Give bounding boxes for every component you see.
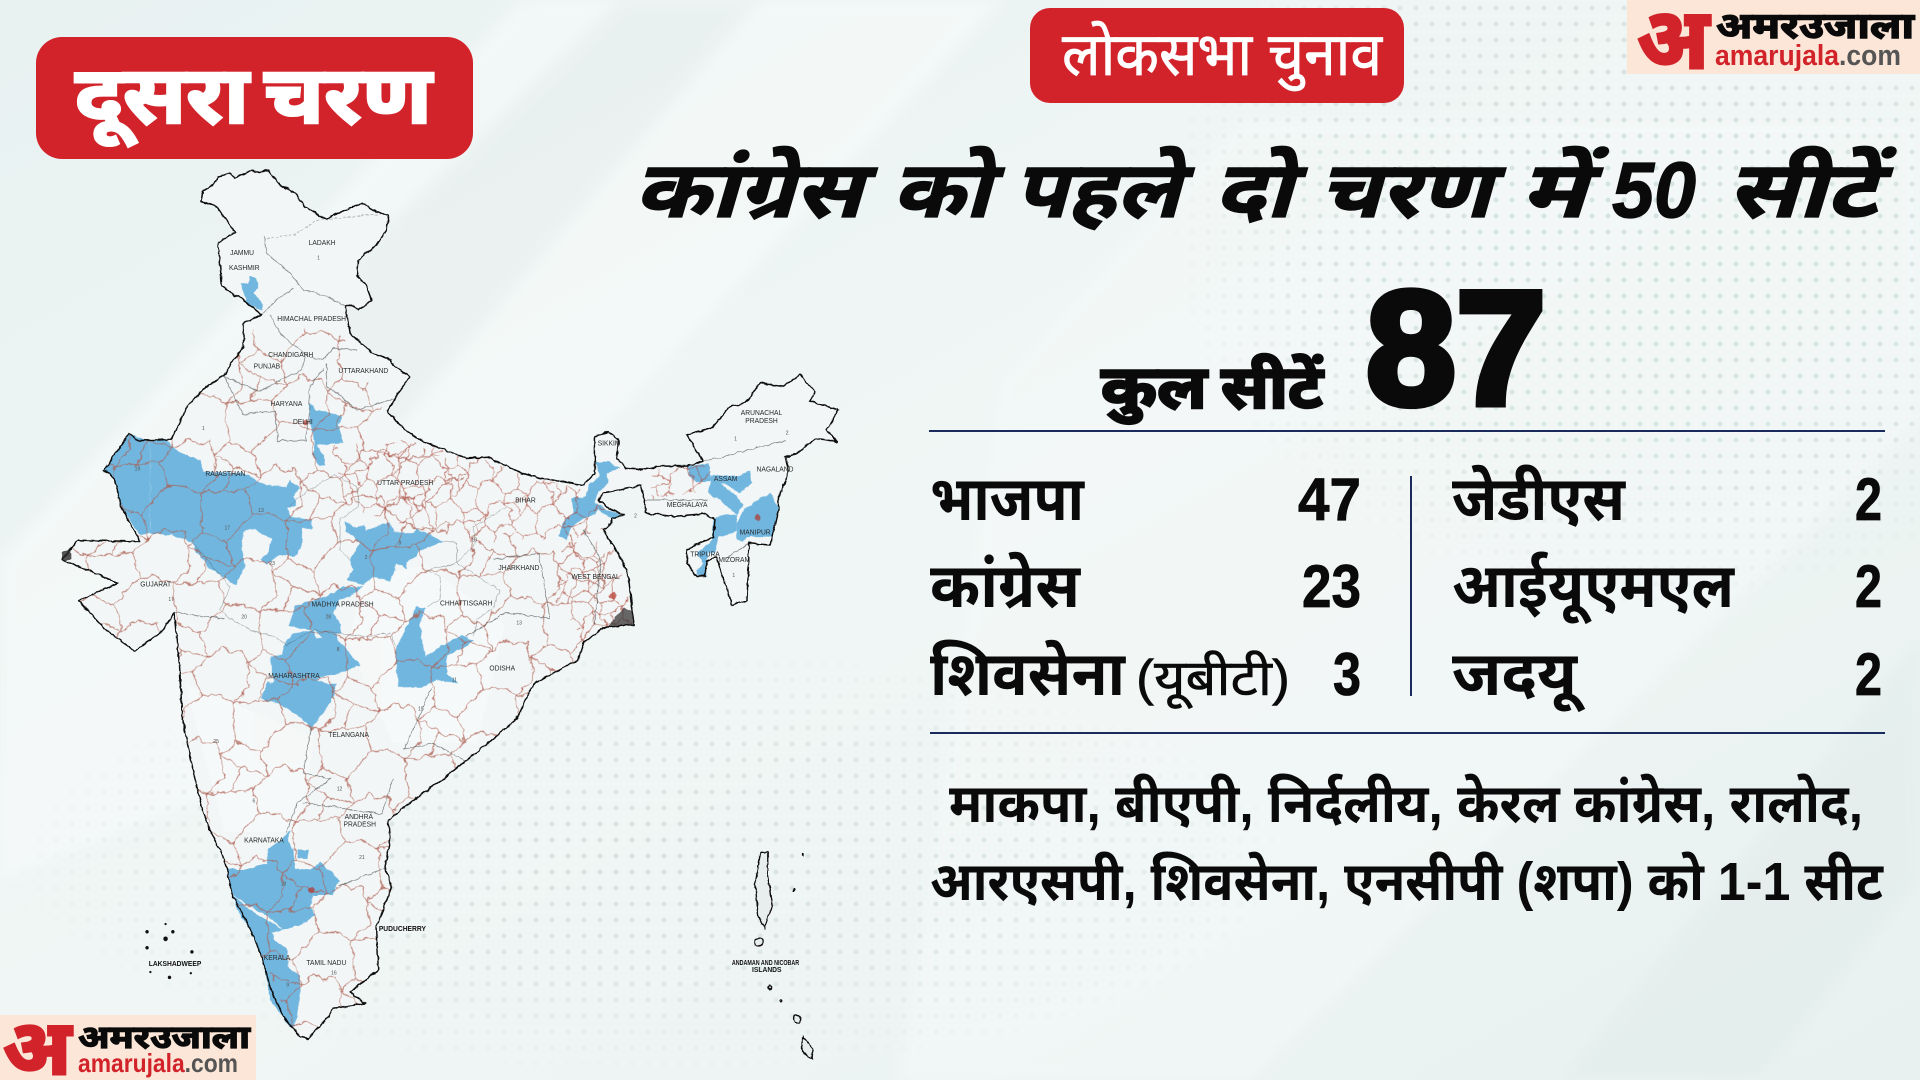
state labels: ANDAMAN AND NICOBAR (732, 960, 799, 967)
map base (62, 170, 838, 1038)
total seats label: कुल (1101, 354, 1209, 425)
map outline (62, 170, 838, 1038)
state labels: CHHATTISGARH (440, 600, 492, 608)
row: BJP: भाजपा (930, 465, 1086, 534)
dark red city clusters (303, 420, 760, 893)
logo: bottom left (0, 1007, 256, 1080)
constituency numbers: 11 (452, 677, 457, 683)
state labels: BIHAR (515, 497, 536, 504)
state labels: LADAKH (309, 240, 336, 247)
constituency numbers: 9 (398, 540, 401, 546)
logo: bottom left: amarujala.com (78, 1048, 238, 1078)
headline: 50 (1612, 145, 1696, 234)
constituency numbers: 25 (213, 739, 219, 745)
logo: top right (1627, 0, 1920, 87)
badge: second phase: दूसरा (75, 51, 251, 147)
state labels: UTTARAKHAND (338, 368, 388, 375)
constituency numbers: 13 (258, 508, 264, 514)
state labels (140, 240, 799, 974)
others note: माकपा, बीएपी, निर्दलीय, केरल कांग्रेस, रालोद, (949, 773, 1863, 834)
badge: Lok Sabha election: लोकसभा चुनाव (1062, 21, 1384, 91)
state labels: CHANDIGARH (268, 352, 313, 359)
constituency numbers: 12 (337, 786, 342, 793)
state labels: SIKKIM (598, 440, 621, 447)
logo: top right: amarujala.com (1715, 40, 1901, 72)
state labels: MEGHALAYA (667, 502, 708, 509)
headline: कांग्रेस (634, 145, 878, 234)
total seats number: 87 (1366, 258, 1546, 439)
headline: पहले (1014, 145, 1195, 234)
state labels: ISLANDS (752, 967, 782, 974)
constituency numbers: 6 (253, 798, 255, 804)
row: Congress: 23 (1302, 553, 1361, 620)
constituency numbers: 23 (269, 561, 275, 567)
seat table (930, 463, 1882, 713)
Kutch coast detail (62, 550, 72, 560)
state labels: DELHI (293, 419, 313, 426)
islands: Andaman and Nicobar (755, 853, 813, 1059)
row: JDU: 2 (1855, 641, 1882, 708)
constituency numbers: 28 (326, 614, 331, 621)
headline: में (1520, 145, 1609, 234)
state labels: ANDHRA (345, 814, 373, 821)
row: JDU (1452, 640, 1882, 713)
white inner states (185, 565, 505, 832)
state labels: NAGALAND (757, 466, 793, 474)
row: JDS: जेडीएस (1452, 463, 1626, 534)
state borders (174, 213, 786, 885)
map of India (62, 168, 840, 1060)
state labels: TRIPURA (690, 551, 720, 558)
state labels: ASSAM (714, 476, 738, 483)
state labels: TELANGANA (328, 732, 369, 739)
state labels: MADHYA PRADESH (311, 602, 374, 609)
state labels: TAMIL NADU (306, 960, 346, 967)
constituency numbers: 2 (365, 555, 368, 561)
state labels: MANIPUR (740, 529, 771, 536)
state labels: ODISHA (489, 666, 516, 673)
row: JDS: 2 (1855, 466, 1882, 533)
constituency numbers: 17 (168, 597, 174, 603)
constituency numbers (135, 256, 789, 988)
state labels: HARYANA (271, 401, 303, 408)
badge: second phase (36, 37, 473, 159)
state labels: MIZORAM (718, 557, 750, 564)
constituency numbers: 1 (732, 573, 735, 579)
constituency numbers: 2 (786, 431, 789, 437)
rule top (929, 430, 1885, 432)
logo: bottom left: अमरउजाला (78, 1019, 251, 1055)
constituency numbers: 9 (286, 982, 289, 988)
row: Shiv Sena UBT: शिवसेना (930, 638, 1127, 709)
state labels: WEST BENGAL (571, 574, 620, 581)
constituency numbers: 10 (471, 537, 477, 544)
Sundarbans detail (609, 608, 633, 626)
constituency numbers: 13 (516, 620, 522, 627)
constituency numbers: 1 (734, 437, 737, 443)
badge: Lok Sabha election (1030, 8, 1404, 103)
row: Congress: कांग्रेस (930, 550, 1081, 621)
state labels: JAMMU (230, 250, 254, 257)
others note (930, 773, 1884, 912)
constituency numbers: 15 (418, 706, 424, 713)
state labels: JHARKHAND (498, 565, 539, 572)
badge: second phase: चरण (264, 51, 434, 140)
headline: चरण (1319, 145, 1506, 234)
state labels: PRADESH (343, 822, 376, 829)
rule bottom (930, 732, 1885, 734)
constituency numbers: 18 (281, 881, 286, 888)
state labels: ARUNACHAL (741, 410, 782, 417)
row: Shiv Sena UBT: (यूबीटी) (1136, 650, 1290, 710)
islands: Lakshadweep (145, 923, 194, 979)
state labels: RAJASTHAN (205, 471, 245, 478)
constituency numbers: 8 (337, 647, 340, 653)
state labels: PUDUCHERRY (379, 926, 426, 933)
constituency numbers: 1 (202, 426, 205, 432)
constituency numbers: 21 (359, 855, 365, 861)
constituency numbers: 1 (317, 256, 320, 262)
total seats label: सीटें (1221, 354, 1325, 421)
row: JDS (1452, 463, 1882, 534)
state labels: UTTAR PRADESH (377, 480, 433, 487)
row: IUML: आईयूएमएल (1452, 551, 1735, 625)
headline: को (892, 145, 1005, 234)
column divider (1410, 476, 1412, 696)
state labels: KASHMIR (229, 265, 260, 272)
blue second-phase constituencies (104, 277, 778, 1027)
state labels: HIMACHAL PRADESH (277, 316, 346, 323)
constituency numbers: 2 (634, 514, 637, 520)
logo: top right: अमरउजाला (1716, 5, 1916, 46)
state labels: PRADESH (745, 418, 778, 425)
headline: दो (1214, 145, 1308, 234)
state labels: KARNATAKA (244, 838, 284, 845)
state labels: PUNJAB (254, 363, 281, 370)
row: IUML (1452, 551, 1882, 625)
row: Shiv Sena UBT (930, 638, 1361, 710)
row: Shiv Sena UBT: 3 (1333, 641, 1361, 708)
row: JDU: जदयू (1452, 640, 1586, 713)
row: BJP: 47 (1298, 466, 1361, 533)
constituency boundaries (56, 328, 713, 1052)
headline (634, 145, 1897, 234)
constituency numbers: 17 (224, 525, 230, 532)
row: BJP (930, 465, 1361, 534)
constituency numbers: 16 (331, 970, 337, 976)
state labels: KERALA (264, 955, 291, 962)
constituency numbers: 19 (135, 466, 140, 472)
constituency numbers: 20 (241, 614, 247, 621)
state labels: MAHARASHTRA (268, 673, 320, 680)
state labels: LAKSHADWEEP (149, 961, 202, 968)
total seats label (1101, 354, 1325, 425)
row: IUML: 2 (1855, 553, 1882, 620)
row: Congress (930, 550, 1361, 621)
headline: सीटें (1727, 145, 1897, 234)
state labels: GUJARAT (140, 581, 172, 589)
